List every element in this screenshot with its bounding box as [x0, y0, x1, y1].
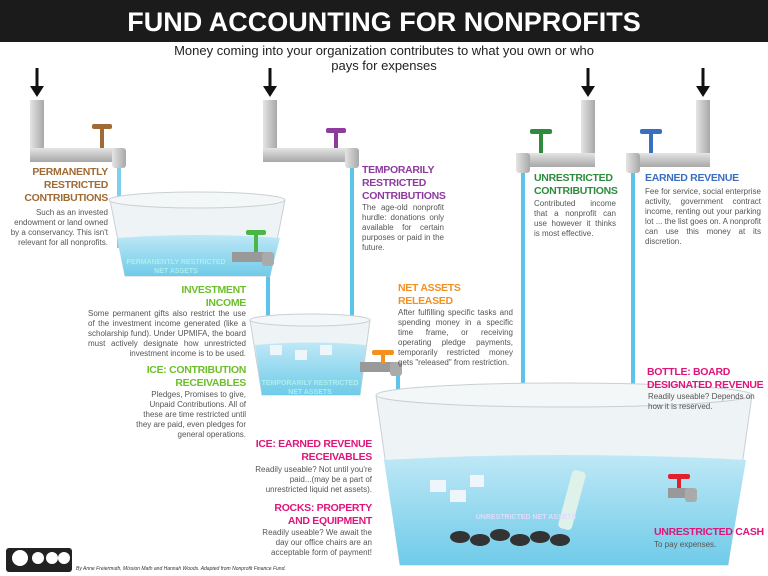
net assets released text: After fulfilling specific tasks and spending money in a specific time frame, or receiving operating pledge payments, temporarily restricted money gets "released" from restriction. [398, 308, 513, 367]
ice contribution heading: ICE: CONTRIBUTION RECEIVABLES [147, 364, 246, 389]
net assets released heading: NET ASSETS RELEASED [398, 282, 461, 307]
subtitle [174, 43, 594, 73]
bottle text: Readily useable? Depends on how it is reserved. [648, 392, 755, 411]
rocks text: Readily useable? We await the day our office chairs are an acceptable form of payment! [262, 528, 372, 557]
unrestricted cash text: To pay expenses. [654, 540, 716, 549]
water streams [117, 168, 635, 473]
rocks heading: ROCKS: PROPERTY AND EQUIPMENT [274, 502, 372, 527]
earned revenue heading: EARNED REVENUE [645, 172, 739, 184]
bucket 1: PERMANENTLY RESTRICTED [126, 259, 226, 266]
bucket 2: TEMPORARILY RESTRICTED [262, 380, 358, 387]
cc badge [6, 548, 72, 572]
subtitle: Money coming into your organization contributes to what you own or who [174, 43, 594, 58]
pipes [30, 100, 710, 173]
temporarily restricted text: The age-old nonprofit hurdle: donations only available for certain purposes or paid in the future. [362, 203, 444, 252]
title bar [0, 0, 768, 42]
earned revenue text: Fee for service, social enterprise activity, government contract income, renting out your parking lot ... the list goes on. A nonprofit can use this money at its discretion. [645, 187, 761, 246]
bucket 2 [250, 314, 402, 396]
bucket 1 [109, 192, 285, 276]
subtitle: pays for expenses [331, 58, 437, 73]
unrestricted cash heading: UNRESTRICTED CASH [654, 526, 764, 538]
unrestricted contributions text: Contributed income that a nonprofit can use however it thinks is most effective. [534, 199, 616, 238]
arrows [30, 68, 710, 97]
credit: By Anne Freiermuth, Mission Math and Hannah Woods. Adapted from Nonprofit Finance Fund. [76, 566, 286, 572]
title bar: FUND ACCOUNTING FOR NONPROFITS [127, 7, 641, 37]
bottle heading: BOTTLE: BOARD DESIGNATED REVENUE [647, 366, 763, 391]
investment income heading: INVESTMENT INCOME [181, 284, 246, 309]
investment income text: Some permanent gifts also restrict the use of the investment income generated (like a scholarship fund). Under UPMIFA, the board must actively designate how unrestricted investment income is to be used. [88, 309, 246, 358]
permanently restricted text: Such as an invested endowment or land owned by a conservancy. This isn't relevant for all nonprofits. [11, 208, 108, 247]
big bucket [376, 383, 752, 565]
faucet handles [92, 124, 662, 153]
bucket 1: NET ASSETS [154, 268, 198, 275]
ice earned text: Readily useable? Not until you're paid...(may be a part of unrestricted liquid net assets). [255, 465, 372, 494]
permanently restricted heading: PERMANENTLY RESTRICTED CONTRIBUTIONS [24, 166, 108, 204]
big bucket: UNRESTRICTED NET ASSETS [476, 514, 577, 521]
unrestricted contributions heading: UNRESTRICTED CONTRIBUTIONS [534, 172, 618, 197]
bucket 2: NET ASSETS [288, 389, 332, 396]
ice contribution text: Pledges, Promises to give, Unpaid Contributions. All of these are time restricted until they are paid, even pledges for general operations. [136, 390, 246, 439]
temporarily restricted heading: TEMPORARILY RESTRICTED CONTRIBUTIONS [362, 164, 446, 202]
ice earned heading: ICE: EARNED REVENUE RECEIVABLES [256, 438, 372, 463]
